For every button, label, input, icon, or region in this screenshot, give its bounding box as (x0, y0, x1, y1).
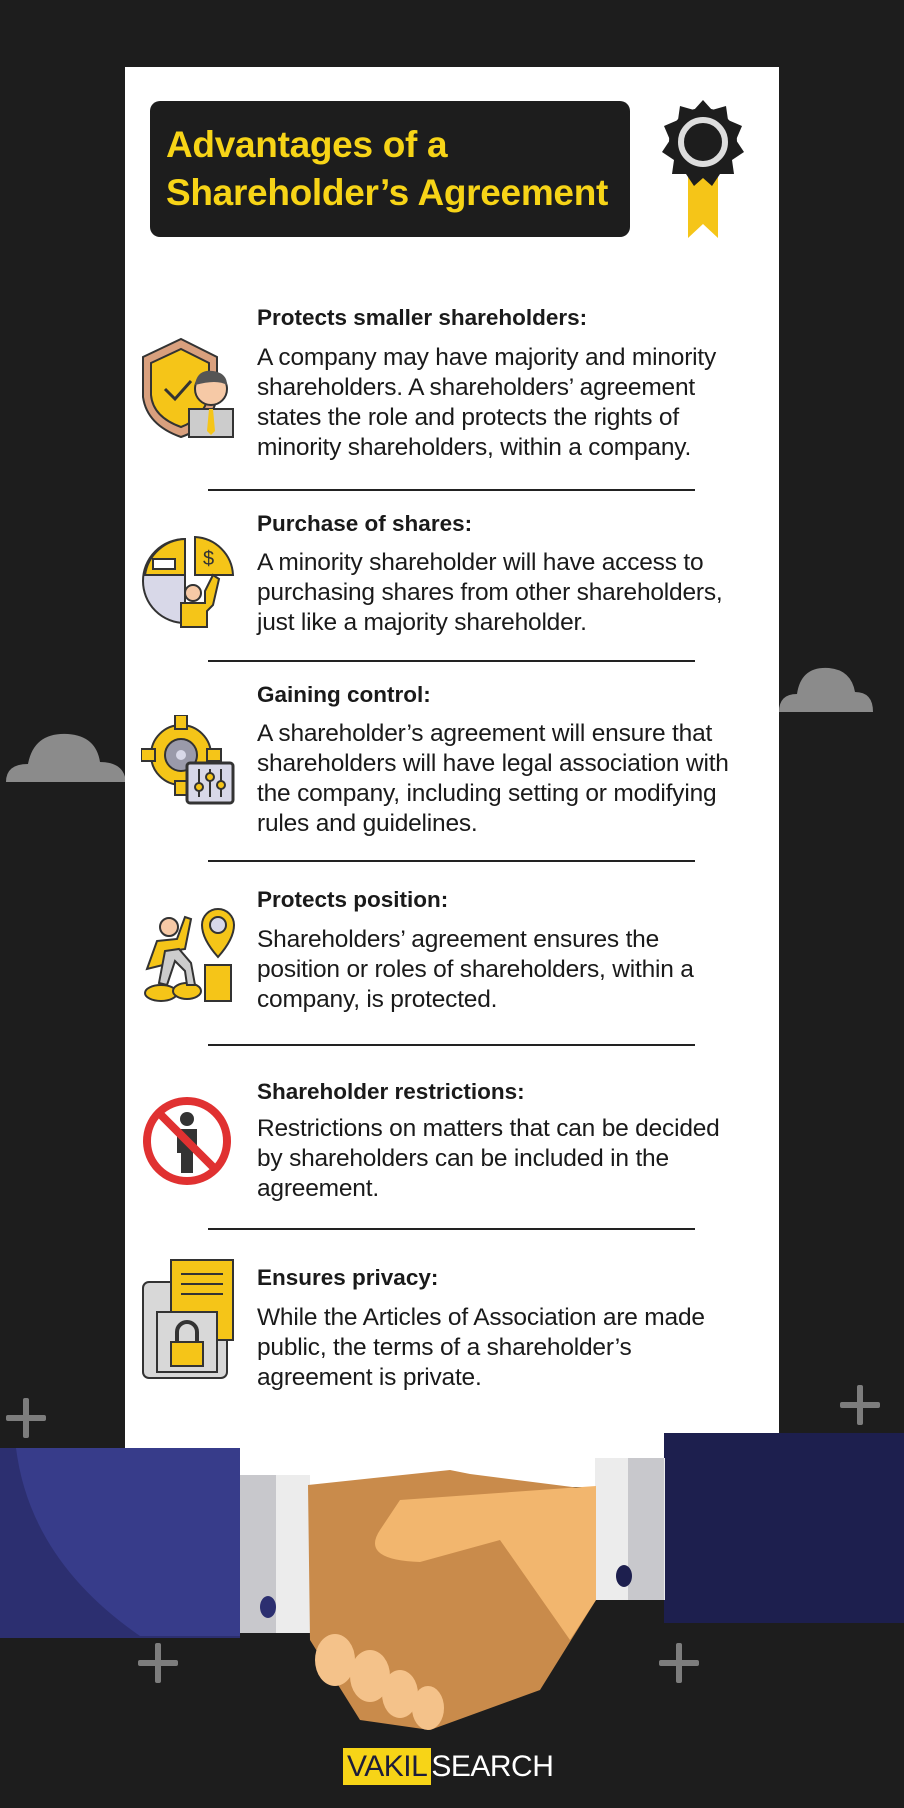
text 5: Restrictions on matters that can be decided (257, 1115, 720, 1142)
text 1: shareholders. A shareholders’ agreement (257, 374, 695, 401)
text 6 (257, 1304, 705, 1391)
text 5: by shareholders can be included in the (257, 1145, 669, 1172)
text 1: minority shareholders, within a company. (257, 434, 691, 461)
item 6 (142, 1259, 705, 1391)
text 4: Shareholders’ agreement ensures the (257, 926, 659, 953)
icon: shield person (142, 338, 234, 438)
icon: pie chart: $ (203, 548, 214, 570)
icon: document lock (142, 1259, 234, 1379)
heading 1: Protects smaller shareholders: (257, 305, 587, 330)
cloud right (779, 668, 873, 712)
icon: badge (662, 100, 744, 238)
text 1: A company may have majority and minority (257, 344, 716, 371)
text 5 (257, 1115, 720, 1202)
heading 5: Shareholder restrictions: (257, 1079, 525, 1104)
heading 2: Purchase of shares: (257, 511, 472, 536)
text 6: public, the terms of a shareholder’s (257, 1334, 632, 1361)
white panel (125, 67, 779, 1487)
text 5: agreement. (257, 1175, 379, 1202)
heading 4: Protects position: (257, 887, 448, 912)
cloud left (6, 734, 125, 782)
icon: pie chart (142, 536, 234, 628)
icon: gear with sliders (141, 715, 234, 804)
item 1 (142, 305, 716, 461)
text 6: agreement is private. (257, 1364, 482, 1391)
text 3 (257, 720, 729, 837)
logo (343, 1748, 553, 1785)
title box (150, 101, 630, 237)
text 6: While the Articles of Association are made (257, 1304, 705, 1331)
heading 3: Gaining control: (257, 682, 431, 707)
icon: person climbing (144, 908, 235, 1002)
text 2: A minority shareholder will have access to (257, 549, 703, 576)
item 2 (142, 511, 723, 636)
text 4 (257, 926, 694, 1013)
title box: Shareholder’s Agreement (166, 172, 608, 213)
text 2: purchasing shares from other shareholders, (257, 579, 723, 606)
text 3: rules and guidelines. (257, 810, 478, 837)
text 1: states the role and protects the rights of (257, 404, 679, 431)
text 1 (257, 344, 716, 461)
text 3: A shareholder’s agreement will ensure that (257, 720, 712, 747)
text 4: position or roles of shareholders, within a (257, 956, 694, 983)
logo: SEARCH (431, 1750, 553, 1783)
item 3 (141, 682, 729, 837)
text 3: the company, including setting or modifying (257, 780, 716, 807)
item 5 (143, 1079, 720, 1202)
title box: Advantages of a (166, 124, 447, 165)
heading 6: Ensures privacy: (257, 1265, 438, 1290)
handshake illustration (0, 1433, 904, 1730)
text 2: just like a majority shareholder. (257, 609, 587, 636)
plus signs (6, 1398, 46, 1438)
text 2 (256, 549, 723, 636)
logo: VAKIL (347, 1750, 427, 1783)
item 4 (144, 887, 694, 1013)
text 4: company, is protected. (257, 986, 497, 1013)
text 3: shareholders will have legal association with (257, 750, 729, 777)
icon: no entry person (143, 1097, 231, 1185)
